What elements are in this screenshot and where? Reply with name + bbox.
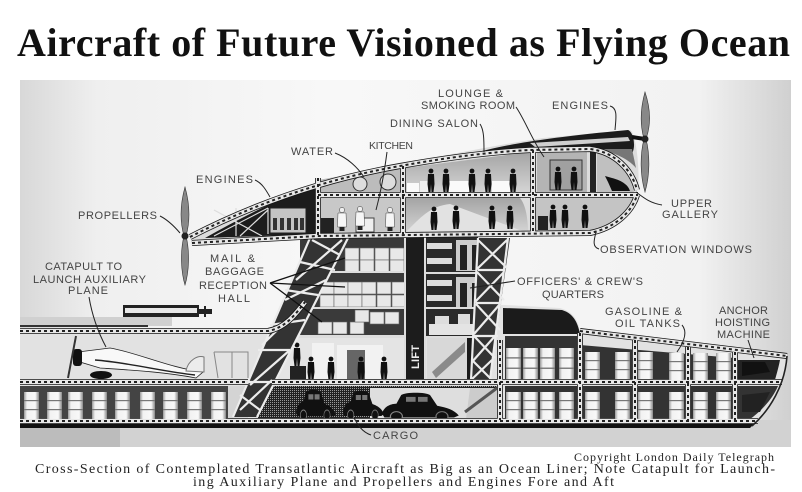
label: kitchen (369, 140, 413, 210)
label: mail and baggage: MAIL & (210, 253, 256, 265)
copyright: Copyright London Daily Telegraph (574, 450, 774, 464)
deck trusses (20, 149, 787, 421)
icon: left propeller (181, 187, 189, 285)
central tower (258, 237, 498, 421)
label: water (291, 146, 364, 177)
room: lower salon (406, 198, 528, 232)
label: engines left: ENGINES (196, 174, 253, 186)
crew quarters (426, 237, 479, 381)
label: kitchen: KITCHEN (369, 140, 413, 152)
label: anchor machine: HOISTING (715, 317, 770, 329)
label: engines right (552, 100, 616, 130)
label: gasoline and oil tanks (605, 306, 685, 352)
label: anchor machine (715, 305, 770, 358)
label: upper gallery: UPPER (671, 198, 712, 210)
title: Aircraft of Future Visioned as Flying Ocean (17, 20, 790, 65)
stairs (427, 338, 467, 381)
room: kitchen (320, 198, 402, 233)
lower left hold (20, 386, 228, 419)
label: cargo (354, 418, 418, 442)
label: mail and baggage: HALL (218, 293, 250, 305)
upper wing (190, 130, 639, 246)
label: officers and crew: OFFICERS' & CREW'S (517, 276, 643, 288)
label: mail and baggage (199, 253, 345, 322)
catapult (123, 305, 212, 317)
label: lounge and smoking room: LOUNGE & (438, 88, 504, 100)
label: officers and crew: QUARTERS (542, 289, 604, 301)
lattice struts (233, 238, 510, 417)
caption: Cross-Section of Contemplated Transatlantic Aircraft as Big as an Ocean Liner; Note Catapult for Launch- (35, 462, 775, 477)
label: upper gallery (636, 192, 719, 221)
label: propellers (78, 210, 180, 233)
label: dining salon (390, 118, 484, 152)
hull bottom band (20, 423, 755, 428)
engine nacelle right (475, 130, 634, 156)
aircraft cross-section (20, 130, 787, 428)
label: officers and crew (470, 276, 643, 301)
room: observation (536, 198, 634, 231)
cargo deck (258, 386, 498, 421)
hold dark right (505, 336, 735, 380)
lift label: LIFT (410, 345, 422, 369)
caption: ing Auxiliary Plane and Propellers and Engines Fore and Aft (193, 475, 614, 490)
label: cargo: CARGO (373, 430, 418, 442)
label: lounge and smoking room: SMOKING ROOM (421, 100, 515, 112)
water tanks (318, 166, 400, 192)
label: observation windows: OBSERVATION WINDOWS (600, 244, 752, 256)
room: dining salon (405, 152, 530, 192)
anchor machine (742, 362, 770, 412)
label: catapult: PLANE (68, 285, 108, 297)
room: nose upper gallery (597, 152, 634, 192)
lift shaft (405, 237, 425, 381)
label: mail and baggage: BAGGAGE (205, 266, 264, 278)
label: propellers: PROPELLERS (78, 210, 157, 222)
icon: right propeller (632, 92, 650, 192)
dark hump (503, 308, 580, 334)
label: anchor machine: ANCHOR (719, 305, 768, 317)
mail shelves (295, 248, 406, 338)
left engine bay (205, 185, 316, 238)
top bar behind catapult (20, 317, 172, 326)
label: catapult: CATAPULT TO (45, 261, 122, 273)
bow line (752, 356, 787, 426)
label: catapult: LAUNCH AUXILIARY (33, 274, 147, 286)
label: engines right: ENGINES (552, 100, 608, 112)
panel: illustration background (20, 80, 791, 447)
label: mail and baggage: RECEPTION (199, 280, 267, 292)
label: upper gallery: GALLERY (662, 209, 719, 221)
label: observation windows (594, 232, 752, 256)
auxiliary plane (68, 336, 248, 379)
label: gasoline and oil tanks: OIL TANKS (615, 318, 680, 330)
reception people (290, 343, 388, 381)
label: catapult (33, 261, 147, 347)
label: lounge and smoking room (421, 88, 544, 157)
label: gasoline and oil tanks: GASOLINE & (605, 306, 683, 318)
label: dining salon: DINING SALON (390, 118, 478, 130)
caption (35, 462, 775, 490)
hull (20, 302, 787, 428)
labels (33, 88, 770, 442)
label: water: WATER (291, 146, 333, 158)
label: engines left (196, 174, 270, 197)
room: lounge and smoking room (537, 152, 587, 192)
label: anchor machine: MACHINE (717, 329, 770, 341)
barrels: gasoline and oil tanks (24, 348, 731, 419)
